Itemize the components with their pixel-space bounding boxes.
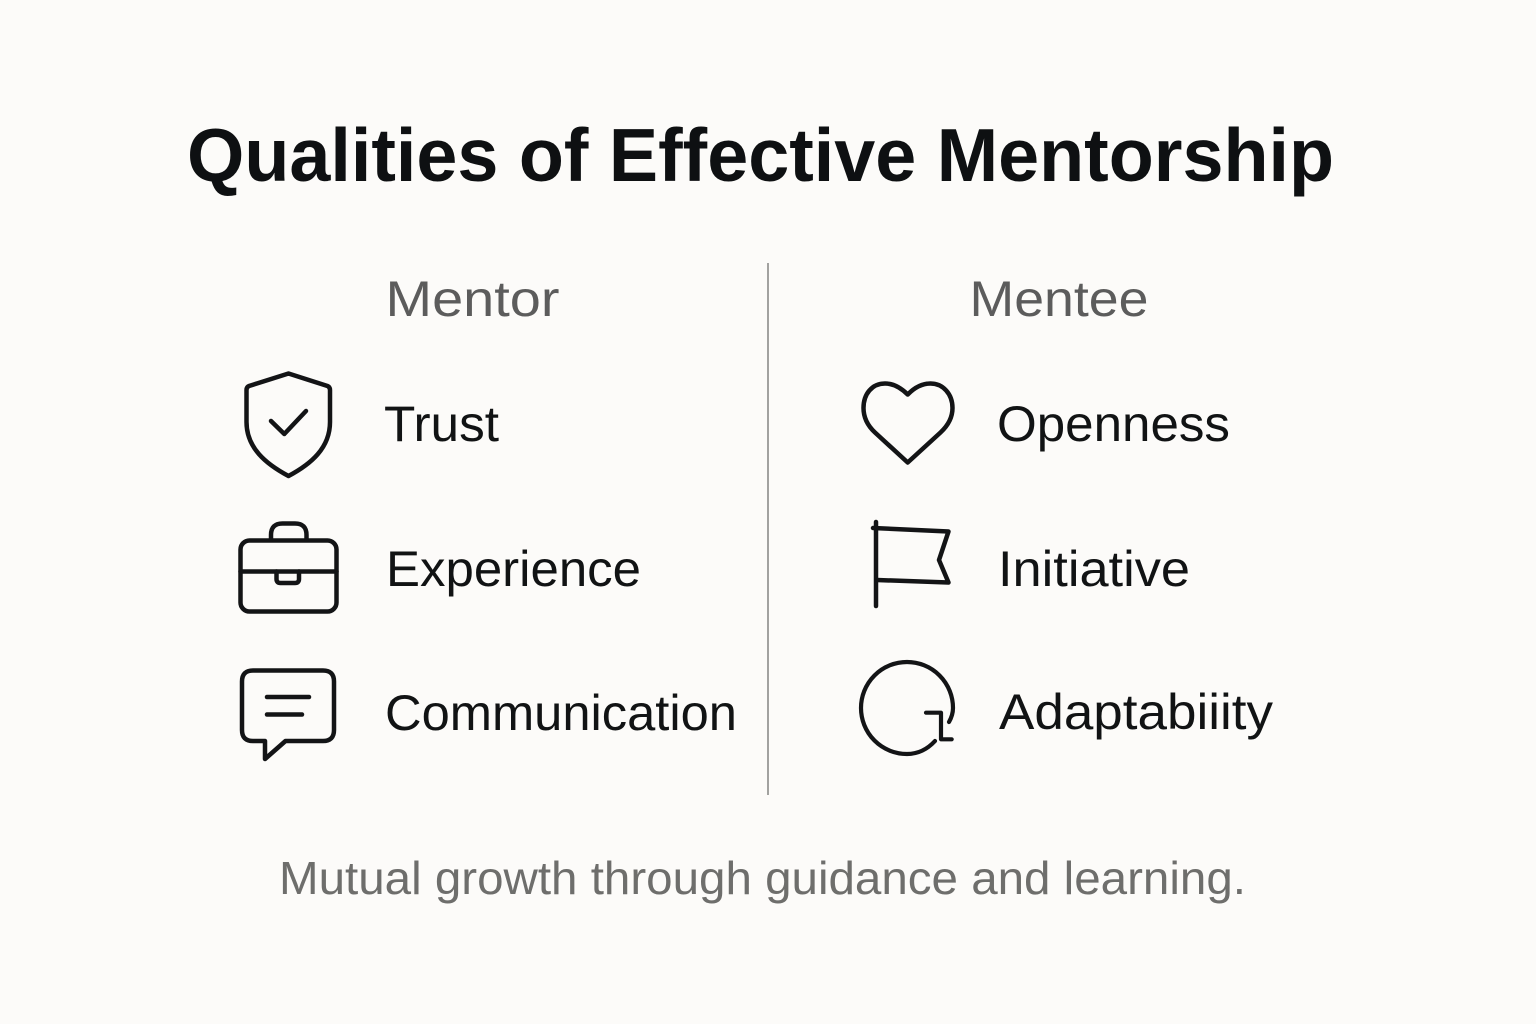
heading: mentor: Mentor	[386, 271, 560, 327]
icon: flag	[873, 522, 948, 606]
panel: mentor	[240, 271, 737, 759]
label: initiative: Initiative	[998, 541, 1190, 597]
label: adaptability: Adaptabiiity	[999, 684, 1273, 740]
label: trust: Trust	[384, 396, 499, 452]
icon: briefcase	[240, 524, 336, 612]
panel: mentee	[861, 271, 1273, 754]
tagline: Mutual growth through guidance and learning.	[279, 852, 1246, 904]
label: communication: Communication	[385, 685, 737, 741]
label: experience: Experience	[386, 541, 641, 597]
heading: mentee: Mentee	[970, 271, 1148, 327]
icon: circular arrow	[861, 662, 953, 754]
icon: shield with check	[246, 374, 330, 476]
icon: heart	[864, 384, 952, 462]
title: Qualities of Effective Mentorship	[187, 113, 1334, 197]
icon: speech bubble	[242, 670, 334, 759]
label: openness: Openness	[997, 396, 1230, 452]
